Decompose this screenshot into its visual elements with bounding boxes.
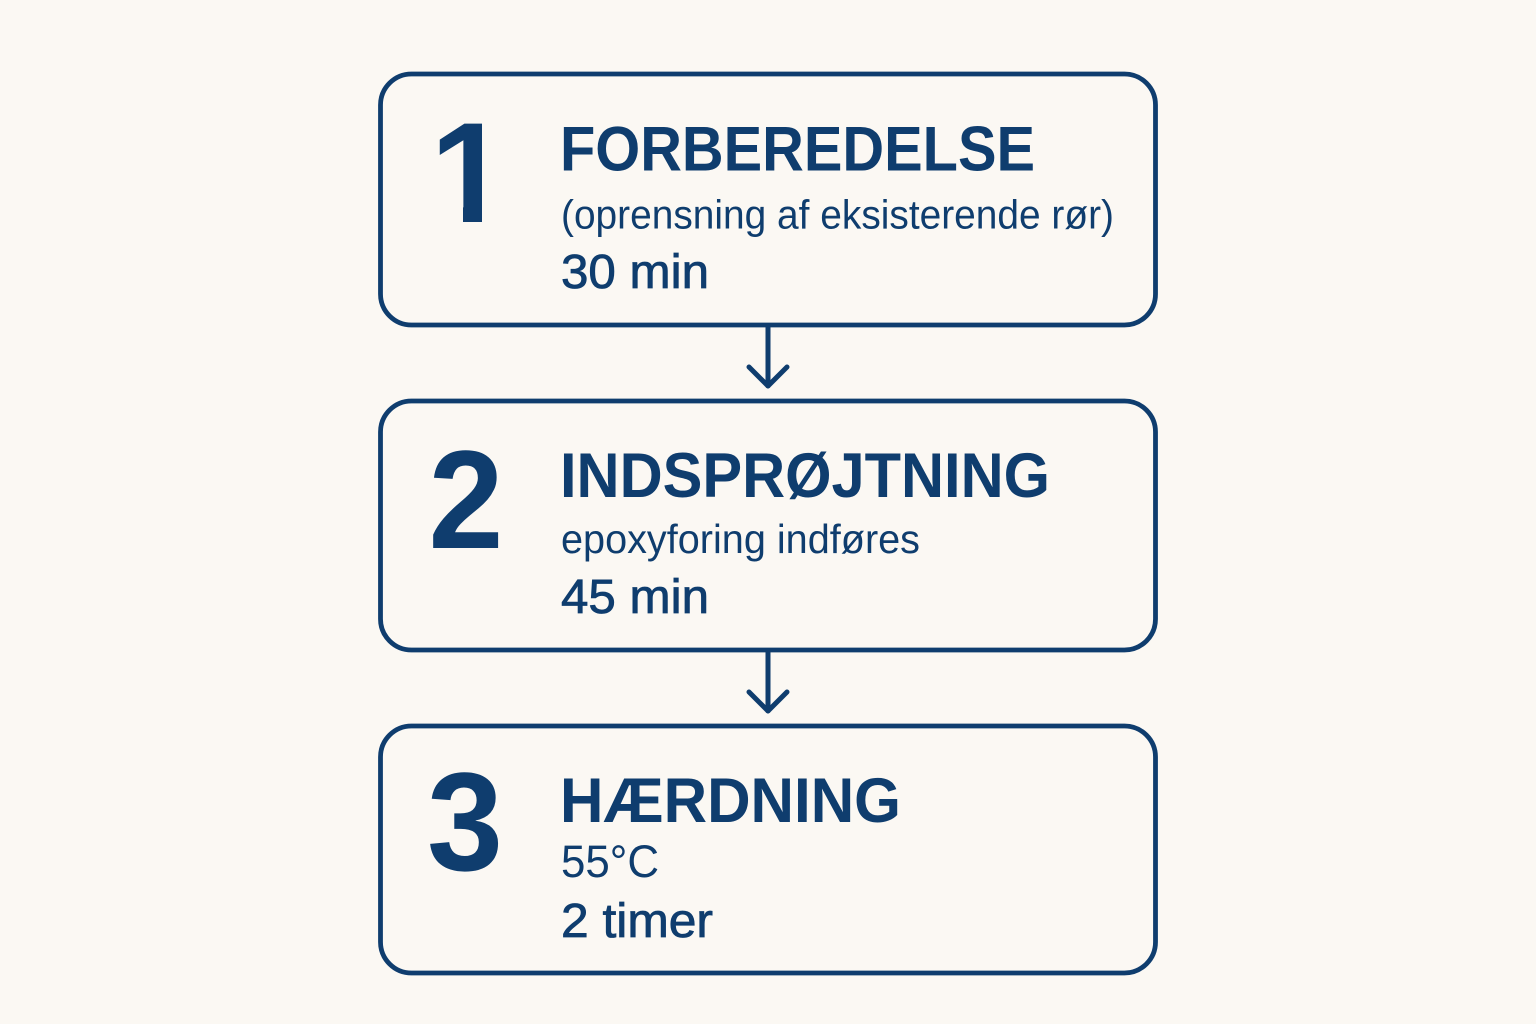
description: step 1: (oprensning af eksisterende rør) [561, 192, 1114, 238]
duration: 30 min: 30 min [561, 246, 709, 299]
description: step 3: 55°C [561, 836, 659, 887]
step number 2: 2 [428, 421, 504, 578]
step number 1: 1 [430, 94, 510, 253]
heading: hærdning: HÆRDNING [560, 766, 901, 836]
step number 3: 3 [427, 743, 503, 900]
panel: step 2 [380, 401, 1156, 650]
duration: 45 min: 45 min [561, 571, 709, 624]
heading: indsprøjtning: INDSPRØJTNING [560, 441, 1050, 511]
panel: step 3 [380, 726, 1156, 973]
description: step 2: epoxyforing indføres [561, 516, 920, 562]
panel: step 1 [380, 74, 1156, 325]
heading: forberedelse: FORBEREDELSE [560, 114, 1035, 184]
duration: 2 timer: 2 timer [561, 895, 713, 948]
arrow: step 1 to 2 [749, 326, 787, 386]
arrow: step 2 to 3 [749, 651, 787, 711]
